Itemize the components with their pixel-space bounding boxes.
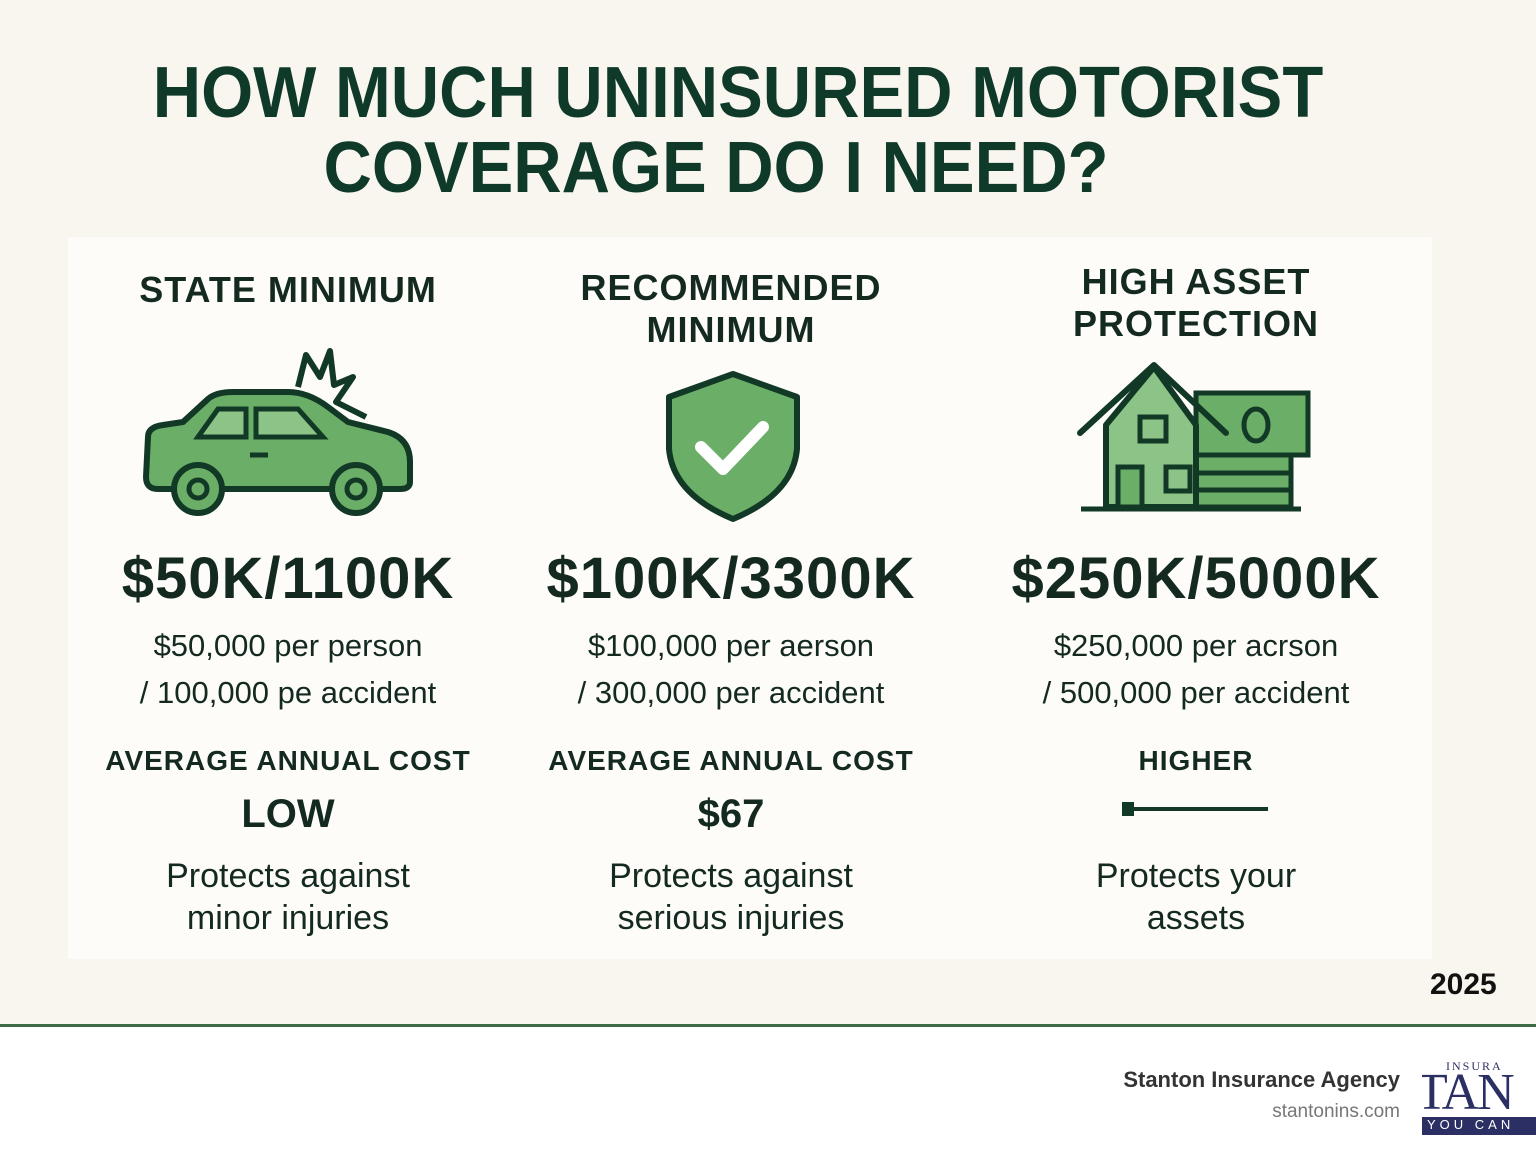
icon: shield check — [666, 371, 800, 522]
cost value: $67 — [698, 792, 764, 836]
detail — [1042, 628, 1350, 710]
column: state minimum — [105, 269, 471, 937]
detail: $250,000 per acrson — [1054, 628, 1338, 663]
detail: $50,000 per person — [154, 628, 422, 663]
description: Protects your — [1096, 857, 1296, 895]
description — [1096, 857, 1296, 937]
title: HOW MUCH UNINSURED MOTORIST — [153, 53, 1323, 133]
footer — [0, 1024, 1536, 1154]
logo: INSURA — [1446, 1059, 1503, 1073]
icon: car crash — [143, 348, 413, 516]
panel: coverage tiers — [68, 237, 1432, 959]
detail — [140, 628, 436, 710]
column: recommended minimum — [547, 267, 915, 937]
description: minor injuries — [187, 899, 389, 937]
heading: recommended — [580, 267, 882, 350]
description: Protects against — [609, 857, 853, 895]
url: stantonins.com — [1272, 1101, 1400, 1122]
icon: slider line — [1122, 802, 1268, 816]
heading: high asset: HIGH ASSET — [1082, 261, 1310, 302]
amount: $100K/3300K — [547, 546, 915, 611]
detail — [578, 628, 884, 710]
cost value: LOW — [241, 792, 335, 836]
logo: YOU CAN — [1427, 1117, 1514, 1132]
description — [609, 857, 853, 937]
title: COVERAGE DO I NEED? — [323, 128, 1109, 208]
icon: house and money — [1077, 362, 1310, 512]
detail: / 300,000 per accident — [578, 675, 884, 710]
cost label: AVERAGE ANNUAL COST — [548, 745, 914, 776]
heading: recommended: MINIMUM — [647, 309, 815, 350]
logo — [1422, 1059, 1536, 1135]
heading: recommended: RECOMMENDED — [580, 267, 882, 308]
amount: $50K/1100K — [122, 546, 454, 611]
detail: / 500,000 per accident — [1043, 675, 1349, 710]
amount: $250K/5000K — [1012, 546, 1380, 611]
heading: state minimum: STATE MINIMUM — [139, 269, 437, 310]
detail: / 100,000 pe accident — [140, 675, 436, 710]
cost label: AVERAGE ANNUAL COST — [105, 745, 471, 776]
description: assets — [1147, 899, 1245, 937]
detail: $100,000 per aerson — [588, 628, 874, 663]
cost label: HIGHER — [1139, 745, 1253, 776]
description: Protects against — [166, 857, 410, 895]
year: 2025 — [1430, 968, 1497, 1001]
column: high asset — [1012, 261, 1380, 937]
description: serious injuries — [618, 899, 844, 937]
heading: high asset — [1073, 261, 1319, 344]
title — [153, 53, 1323, 208]
agency name: Stanton Insurance Agency — [1123, 1067, 1400, 1092]
description — [166, 857, 410, 937]
heading: high asset: PROTECTION — [1073, 303, 1319, 344]
